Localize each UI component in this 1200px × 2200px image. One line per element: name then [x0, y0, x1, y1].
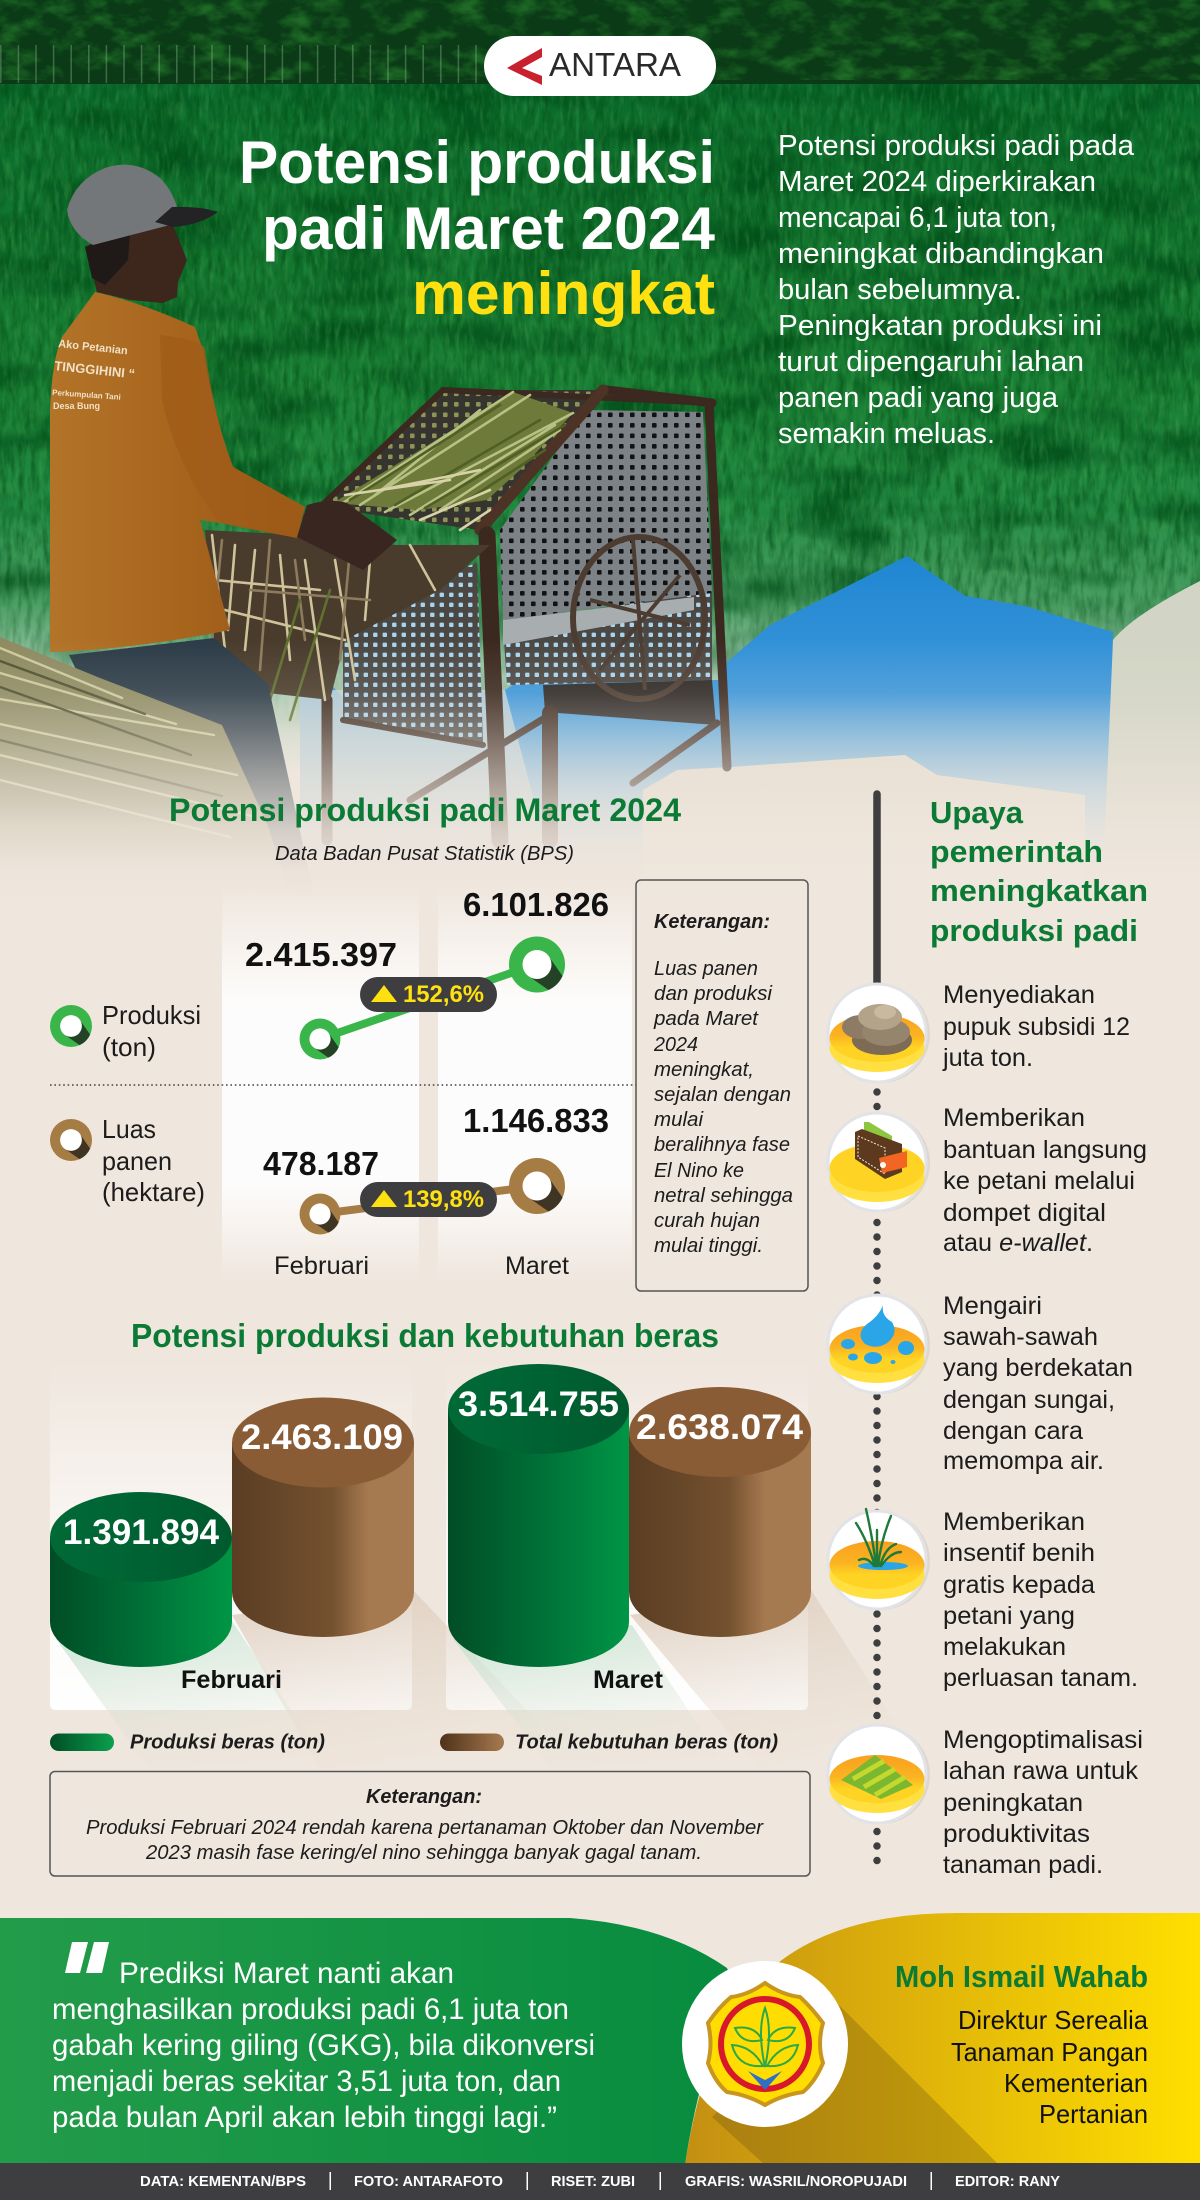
note box: keterangan beras: Produksi Februari 2024 rendah karena pertanaman Oktober dan November	[86, 1817, 764, 1839]
note box: keterangan produksi: mulai tinggi.	[654, 1235, 763, 1257]
legend: produksi	[50, 1000, 201, 1062]
note box: keterangan beras	[50, 1772, 810, 1876]
legend: produksi: (ton)	[102, 1032, 156, 1062]
text: fertilizer: juta ton.	[942, 1044, 1033, 1072]
note box: keterangan produksi	[636, 880, 808, 1291]
legend: luas panen	[50, 1114, 205, 1207]
text: swamp field: Mengoptimalisasi	[943, 1726, 1143, 1754]
text: water: memompa air.	[943, 1447, 1104, 1475]
green cylinder: 1.391.894	[63, 1513, 220, 1552]
panel: Maret background	[446, 1357, 808, 1710]
note box: keterangan produksi: beralihnya fase	[654, 1134, 790, 1156]
note box: keterangan produksi: curah hujan	[654, 1210, 760, 1232]
text: seedling: perluasan tanam.	[943, 1664, 1138, 1692]
series: produksi: 6.101.826	[463, 886, 609, 923]
pale ground under the machine	[300, 690, 535, 808]
name and position: Direktur Serealia	[958, 2005, 1149, 2035]
axis label: Maret: Maret	[505, 1252, 569, 1280]
text: water: dengan sungai,	[943, 1386, 1115, 1414]
series: luas panen	[263, 1102, 609, 1234]
note box: keterangan produksi: 2024	[653, 1034, 698, 1056]
farmer cap	[67, 165, 177, 245]
text: seedling	[943, 1508, 1138, 1692]
axis label: Februari: Februari	[274, 1252, 369, 1280]
shirt sleeve shade	[160, 335, 305, 538]
text: water: sawah-sawah	[943, 1323, 1098, 1351]
emblem: Kementerian Pertanian	[682, 1961, 848, 2127]
brown cylinder	[232, 1398, 414, 1637]
footer credits: EDITOR: RANY	[955, 2173, 1060, 2190]
emblem shadow	[712, 2000, 999, 2165]
quote text: menjadi beras sekitar 3,51 juta ton, dan	[52, 2065, 561, 2098]
note box: keterangan produksi: El Nino ke	[654, 1160, 744, 1182]
label Februari: Februari	[181, 1666, 282, 1694]
subheading: data source: Data Badan Pusat Statistik (BPS)	[275, 843, 574, 865]
text: seedling: insentif benih	[943, 1539, 1095, 1567]
intro paragraph: Maret 2024 diperkirakan	[778, 166, 1096, 198]
footer credits: GRAFIS: WASRIL/NOROPUJADI	[685, 2173, 907, 2190]
heading: upaya pemerintah	[930, 795, 1148, 948]
series: produksi: 152,6%	[403, 981, 484, 1008]
note box: keterangan produksi: mulai	[654, 1109, 704, 1131]
column Maret	[438, 883, 632, 1283]
note box: keterangan produksi: sejalan dengan	[654, 1084, 791, 1106]
shirt print: Perkumpulan Tani	[52, 388, 121, 402]
logo pill: ANTARA	[484, 36, 716, 96]
heading: upaya pemerintah: pemerintah	[930, 834, 1103, 869]
grass texture	[0, 84, 1200, 734]
green cylinder	[50, 1492, 232, 1667]
blue tarpaulin	[300, 556, 1113, 836]
text: swamp field: lahan rawa untuk	[943, 1757, 1139, 1785]
farmer hair	[85, 232, 130, 285]
icon: quotation mark	[65, 1942, 109, 1973]
machine slanted panel	[320, 390, 603, 530]
shirt print: Desa Bung	[53, 401, 100, 411]
quote text	[52, 1957, 595, 2134]
series: luas panen: 1.146.833	[463, 1102, 609, 1139]
fence posts	[0, 45, 480, 83]
shirt print	[52, 338, 136, 411]
chart: produksi and luas panen	[50, 883, 636, 1283]
label Maret: Maret	[593, 1666, 664, 1694]
quote text: Prediksi Maret nanti akan	[119, 1957, 454, 1990]
text: fertilizer	[942, 981, 1130, 1072]
text: seedling: gratis kepada	[943, 1571, 1095, 1599]
machine main panel	[500, 410, 712, 620]
heading: potensi produksi padi: Potensi produksi padi Maret 2024	[169, 792, 681, 828]
intro paragraph: bulan sebelumnya.	[778, 274, 1022, 306]
text: swamp field	[943, 1726, 1143, 1879]
intro paragraph: Peningkatan produksi ini	[778, 310, 1102, 342]
heading: potensi produksi dan kebutuhan beras: Potensi produksi dan kebutuhan beras	[131, 1317, 719, 1354]
name and position: Moh Ismail Wahab	[895, 1959, 1148, 1994]
text: swamp field: tanaman padi.	[943, 1851, 1103, 1879]
cylinder chart: Februari	[50, 1398, 414, 1694]
icon: fertilizer	[828, 984, 930, 1083]
brown cylinder: 2.638.074	[636, 1408, 804, 1447]
machine lower right panel	[503, 590, 712, 685]
column Februari	[222, 883, 419, 1283]
text: wallet: dompet digital	[943, 1199, 1106, 1227]
intro paragraph: semakin meluas.	[778, 418, 995, 450]
legend: produksi beras: Produksi beras (ton)	[130, 1732, 325, 1754]
note box: keterangan produksi: dan produksi	[654, 983, 773, 1005]
fade into the beige page	[0, 640, 1200, 902]
shirt print: Ako Petanian	[58, 338, 129, 357]
name and position: Tanaman Pangan	[951, 2037, 1148, 2067]
grass field	[0, 80, 1200, 770]
icon: swamp field	[828, 1725, 930, 1824]
title	[239, 129, 716, 327]
name and position	[895, 1959, 1149, 2129]
white tank	[643, 755, 1085, 829]
intro paragraph: mencapai 6,1 juta ton,	[778, 202, 1057, 234]
grain sack	[1106, 581, 1200, 820]
panel: Februari background	[50, 1357, 412, 1710]
series: luas panen: 478.187	[263, 1145, 379, 1182]
machine lower left panel	[343, 563, 483, 743]
text: seedling: melakukan	[943, 1633, 1066, 1661]
heading: upaya pemerintah: meningkatkan	[930, 873, 1148, 908]
panel: yellow profile background	[685, 1913, 1200, 2165]
series: produksi	[245, 886, 609, 1059]
footer credits: FOTO: ANTARAFOTO	[354, 2173, 503, 2190]
text: water	[943, 1292, 1133, 1475]
green cylinder	[448, 1364, 629, 1667]
quote text: menghasilkan produksi padi 6,1 juta ton	[52, 1993, 569, 2026]
title: Potensi produksi	[239, 129, 715, 196]
straw tangle held by farmer	[205, 530, 490, 720]
forest foliage	[0, 0, 1200, 80]
intro paragraph: meningkat dibandingkan	[778, 238, 1104, 270]
quote text: gabah kering giling (GKG), bila dikonversi	[52, 2029, 595, 2062]
note box: keterangan produksi: Keterangan:	[654, 911, 770, 933]
farmer trousers	[69, 638, 306, 864]
cap brim	[155, 207, 218, 227]
straw heap foreground	[0, 637, 275, 856]
cylinder shadows	[56, 1590, 900, 1770]
text: swamp field: peningkatan	[943, 1789, 1083, 1817]
text: water: dengan cara	[943, 1417, 1083, 1445]
text: water: yang berdekatan	[943, 1354, 1133, 1382]
brown cylinder: 2.463.109	[241, 1418, 403, 1457]
machine frame	[320, 390, 727, 840]
text: swamp field: produktivitas	[943, 1820, 1090, 1848]
footer credits	[0, 2163, 1200, 2200]
straw heap lines	[0, 648, 252, 837]
title: meningkat	[412, 260, 715, 327]
farmer hand	[297, 501, 397, 570]
photo: rice field with farmer and threshing machine	[0, 0, 1200, 902]
text: fertilizer: Menyediakan	[943, 981, 1095, 1009]
text: wallet	[943, 1104, 1147, 1257]
cylinder chart: Maret	[448, 1364, 811, 1694]
legend: produksi: Produksi	[102, 1000, 201, 1030]
heading: upaya pemerintah: Upaya	[930, 795, 1024, 830]
icon: wallet	[828, 1113, 930, 1212]
footer credits: RISET: ZUBI	[551, 2173, 635, 2190]
text: seedling: Memberikan	[943, 1508, 1085, 1536]
brown cylinder	[629, 1387, 811, 1637]
series: luas panen: 139,8%	[403, 1186, 484, 1213]
text: seedling: petani yang	[943, 1602, 1075, 1630]
panel: green quote background	[0, 1918, 760, 2165]
shirt print: TINGGIHINI “	[54, 358, 136, 381]
icon: water	[828, 1295, 930, 1394]
forest strip	[0, 0, 1200, 84]
title: padi Maret 2024	[262, 195, 716, 262]
footer credits: DATA: KEMENTAN/BPS	[140, 2173, 306, 2190]
text: wallet: atau e-wallet.	[943, 1229, 1093, 1257]
farmer neck and face	[85, 225, 187, 303]
timeline dots	[873, 1092, 881, 1872]
legend: luas panen: Luas	[102, 1114, 156, 1144]
series: produksi: 2.415.397	[245, 936, 397, 973]
logo mark	[507, 48, 542, 85]
intro paragraph: turut dipengaruhi lahan	[778, 346, 1084, 378]
machine dark lower interior	[543, 680, 716, 725]
green cylinder: 3.514.755	[458, 1385, 619, 1424]
note box: keterangan beras: 2023 masih fase kering/el nino sehingga banyak gagal tanam.	[145, 1842, 702, 1864]
icon: seedling	[828, 1509, 930, 1610]
text: wallet: ke petani melalui	[943, 1167, 1135, 1195]
legend: total kebutuhan beras: Total kebutuhan beras (ton)	[515, 1732, 778, 1754]
text: wallet: bantuan langsung	[943, 1136, 1147, 1164]
note box: keterangan beras: Keterangan:	[366, 1786, 482, 1808]
timeline bar	[873, 794, 881, 984]
farmer shirt	[50, 292, 305, 652]
text: fertilizer: pupuk subsidi 12	[943, 1013, 1130, 1041]
note box: keterangan produksi: meningkat,	[654, 1059, 754, 1081]
intro paragraph: Potensi produksi padi pada	[778, 130, 1135, 162]
quote text: pada bulan April akan lebih tinggi lagi.”	[52, 2101, 557, 2134]
note box: keterangan produksi: pada Maret	[653, 1008, 759, 1030]
legend: luas panen: (hektare)	[102, 1177, 205, 1207]
name and position: Pertanian	[1039, 2099, 1148, 2129]
name and position: Kementerian	[1004, 2068, 1148, 2098]
straw sheaf in the machine	[333, 392, 573, 530]
legend: luas panen: panen	[102, 1146, 172, 1176]
text: water: Mengairi	[943, 1292, 1042, 1320]
intro paragraph: panen padi yang juga	[778, 382, 1059, 414]
intro paragraph	[778, 130, 1135, 450]
logo wordmark: ANTARA	[549, 46, 681, 83]
machine wheel	[573, 537, 705, 699]
text: wallet: Memberikan	[943, 1104, 1085, 1132]
note box: keterangan produksi: Luas panen	[654, 958, 758, 980]
machine silver plate	[503, 597, 694, 645]
note box: keterangan produksi: netral sehingga	[654, 1185, 793, 1207]
heading: upaya pemerintah: produksi padi	[930, 913, 1138, 948]
